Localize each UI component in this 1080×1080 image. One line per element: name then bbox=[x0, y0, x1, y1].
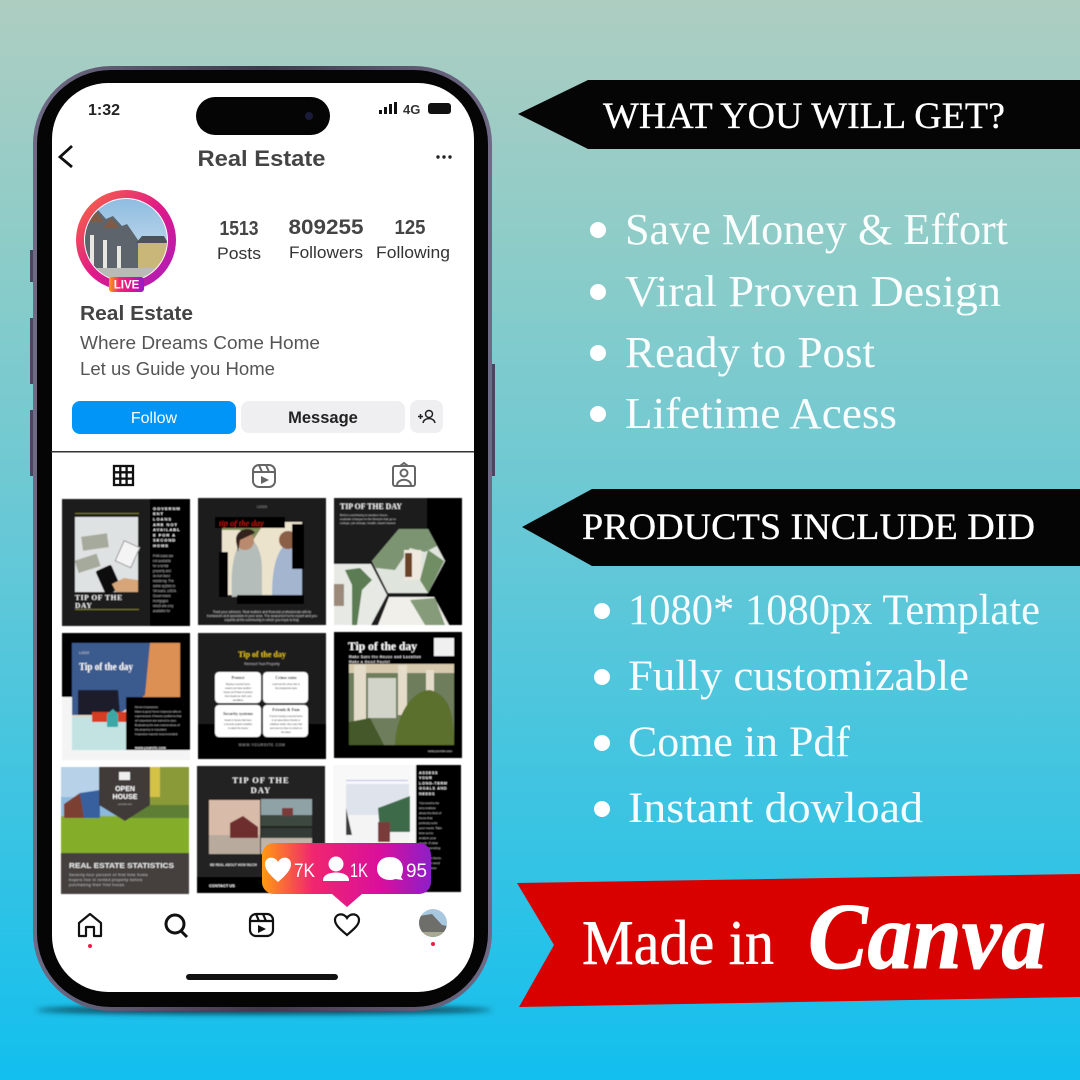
post thumbnail 2: LOGO bbox=[257, 505, 267, 509]
post thumbnail 4: Home inspections bbox=[135, 705, 159, 709]
likes count: 7K bbox=[294, 861, 315, 882]
post thumbnail 7: Seventy-four percent of first time home bbox=[69, 873, 148, 877]
post thumbnail 9: home that bbox=[419, 816, 433, 820]
back arrow bbox=[60, 146, 72, 167]
post thumbnail 5: WWW.YOURSITE.COM bbox=[239, 743, 285, 747]
post thumbnail 5: a security system installed bbox=[224, 723, 253, 726]
bullet: template size: 1080* 1080px Template bbox=[628, 587, 1040, 634]
post thumbnail 2: homework and specialize in your area. The seasoned home expert and you bbox=[207, 614, 317, 618]
post thumbnail 7: buyers live in rented property before bbox=[69, 878, 143, 882]
divider line bbox=[51, 451, 474, 452]
phone mockup bbox=[30, 66, 495, 1014]
ribbon: made in canva: Made in bbox=[582, 907, 774, 978]
post thumbnail 7: yoursite.com bbox=[118, 803, 132, 806]
post thumbnail 1: HOME bbox=[153, 543, 169, 548]
followers count: 1K bbox=[350, 861, 368, 882]
post thumbnail 5: to watch the house bbox=[228, 727, 249, 730]
bullet: instant download: Instant dowload bbox=[628, 785, 923, 832]
post thumbnail 5: the place bbox=[281, 731, 292, 734]
post thumbnail 1: which are only bbox=[153, 604, 174, 608]
post thumbnail 1: ARE NOT bbox=[153, 522, 178, 527]
post thumbnail 5: Crime rates bbox=[275, 675, 297, 680]
status icons: 4G bbox=[403, 102, 420, 117]
post thumbnail 9: you're spending bbox=[419, 846, 440, 850]
post thumbnail 8: CONTACT US bbox=[209, 883, 235, 888]
post thumbnail 7: REAL ESTATE STATISTICS bbox=[69, 862, 174, 870]
follow button bbox=[72, 401, 236, 434]
more menu bbox=[436, 155, 452, 159]
post thumbnail 9: perfectly suits bbox=[419, 821, 438, 825]
profile avatar bbox=[76, 190, 176, 292]
follow button: Follow bbox=[131, 410, 178, 427]
post thumbnail 5: If you're buying a second home bbox=[269, 715, 303, 718]
post thumbnail 8 bbox=[197, 766, 325, 893]
post thumbnail 5: vandalism bbox=[233, 699, 243, 702]
ribbon: made in canva bbox=[517, 874, 1080, 1007]
post thumbnail 9: ASSESS bbox=[419, 771, 438, 775]
banner: products include: PRODUCTS INCLUDE DID bbox=[582, 507, 1035, 548]
post thumbnail 8: DAY bbox=[251, 785, 271, 795]
bullet: viral design: Viral Proven Design bbox=[625, 267, 1001, 316]
post thumbnail 9: analyze your bbox=[419, 836, 436, 840]
benefits list bbox=[590, 205, 1008, 438]
post thumbnail 7: purchasing their first house. bbox=[69, 883, 126, 887]
post thumbnail 5: Tip of the day bbox=[238, 650, 286, 659]
post thumbnail 1 bbox=[62, 499, 190, 626]
profile stats: Followers bbox=[289, 244, 363, 262]
post thumbnail 4: the property is important. bbox=[135, 728, 167, 732]
post thumbnail 5: the prospective area bbox=[275, 687, 297, 690]
post thumbnail 9: your needs. Take bbox=[419, 826, 442, 830]
post thumbnail 5: from break-ins, theft, and bbox=[225, 695, 252, 698]
post thumbnail 9: about the kind of bbox=[419, 811, 441, 815]
post thumbnail 6: Make a Good Fauts! bbox=[349, 660, 390, 664]
post thumbnail 1: VA loans, USDA bbox=[153, 589, 177, 593]
comments count: 95 bbox=[406, 861, 427, 882]
post thumbnail 4: all inspectors are trained to spot. bbox=[135, 718, 177, 722]
bullet: save money: Save Money & Effort bbox=[625, 205, 1008, 254]
icon: person bbox=[323, 856, 349, 881]
post thumbnail 9: very realistic bbox=[419, 806, 436, 810]
post thumbnail 8: BE REAL ABOUT HOW MUCH bbox=[210, 863, 257, 867]
post thumbnail 5: means you have another bbox=[225, 687, 251, 690]
post thumbnail 7 bbox=[61, 767, 189, 894]
post thumbnail 1: same applies to bbox=[153, 584, 176, 588]
post thumbnail 9: GOALS AND bbox=[419, 786, 447, 790]
home indicator bbox=[186, 974, 338, 980]
post thumbnail 1: FHA loans are bbox=[153, 554, 173, 558]
post thumbnail 3: evaluate changes in the lifestyle that go to bbox=[340, 517, 396, 521]
post thumbnail 5: Friends & Fam bbox=[272, 707, 300, 712]
products list bbox=[594, 587, 1040, 832]
post thumbnail 9: retirement home, bbox=[419, 856, 442, 860]
post thumbnail 8: TIP OF THE bbox=[232, 775, 290, 785]
post thumbnail 4: Tip of the day bbox=[79, 662, 133, 673]
post thumbnail 9 bbox=[333, 765, 461, 892]
phone side buttons bbox=[30, 250, 495, 476]
post thumbnail 5: house you'll have to protect bbox=[223, 691, 253, 694]
banner: products include bbox=[522, 489, 1080, 566]
post thumbnail 2 bbox=[198, 498, 326, 625]
post thumbnail 1: do not need bbox=[153, 574, 170, 578]
post thumbnail 1: residency. The bbox=[153, 579, 174, 583]
post thumbnail 9: one with less bbox=[419, 866, 437, 870]
bullet: ready to post: Ready to Post bbox=[625, 328, 875, 377]
post thumbnail 5 bbox=[198, 633, 326, 759]
bullet: lifetime access: Lifetime Acess bbox=[625, 389, 897, 438]
post thumbnail 5: Protect bbox=[232, 675, 245, 680]
post thumbnail 4: www.yoursite.com bbox=[134, 746, 166, 750]
phone body bbox=[33, 66, 492, 1011]
post thumbnail 5: Look into the crime rate in bbox=[272, 683, 300, 686]
phone screen bbox=[52, 83, 474, 992]
banner: what you will get bbox=[518, 80, 1080, 149]
post thumbnail 4: LOGO bbox=[79, 651, 89, 655]
post thumbnail 7: OPEN bbox=[115, 786, 135, 793]
tab: reels icon bbox=[253, 465, 275, 487]
profile bio: Where Dreams Come Home bbox=[80, 333, 320, 353]
post thumbnail 9: upkeep bbox=[419, 871, 429, 875]
post thumbnail 4: Evaluating the true maintenance of bbox=[135, 723, 180, 727]
profile stats bbox=[217, 216, 450, 263]
profile stats: Posts bbox=[217, 245, 261, 263]
post thumbnail 1: for a rental bbox=[153, 564, 169, 568]
post thumbnail 5: Security systems bbox=[223, 711, 253, 716]
post thumbnail 3 bbox=[334, 498, 462, 625]
post thumbnail 1: DAY bbox=[75, 601, 92, 610]
nav: reels icon bbox=[250, 914, 273, 936]
post thumbnail 4: experienced. Inherent problems that bbox=[135, 714, 181, 718]
bullet: pdf: Come in Pdf bbox=[628, 719, 851, 766]
post thumbnail 9: NEEDS bbox=[419, 792, 435, 796]
post thumbnail 9: YOUR bbox=[419, 776, 432, 780]
post thumbnail 4 bbox=[62, 633, 190, 760]
post thumbnail 5: Rennect Your Property bbox=[244, 662, 280, 666]
post thumbnail 1: ENT bbox=[153, 511, 164, 516]
post thumbnail 1: mortgages bbox=[153, 599, 168, 603]
tab: tagged icon bbox=[393, 463, 415, 486]
profile bio: Let us Guide you Home bbox=[80, 359, 275, 379]
post thumbnail 5: and even be there to check on bbox=[270, 727, 303, 730]
post thumbnail 1: E FOR A bbox=[153, 532, 176, 538]
post thumbnail 9: needs. If what bbox=[419, 841, 438, 845]
post thumbnail 4: Inspection reports recommended. bbox=[135, 732, 178, 736]
post thumbnail 2: Trust your advisors. Real realtors and financial professionals will do bbox=[213, 610, 311, 614]
live badge: LIVE bbox=[114, 280, 140, 292]
profile bio: Real Estate bbox=[80, 303, 193, 325]
post thumbnail 9: time out to bbox=[419, 831, 433, 835]
post thumbnail 1: LOANS bbox=[153, 516, 172, 522]
nav: search icon bbox=[166, 915, 187, 937]
post thumbnail 3: college, job change, health, travel interest bbox=[340, 521, 396, 525]
post thumbnail 3: TIP OF THE DAY bbox=[340, 502, 402, 511]
post thumbnail 1: Government bbox=[153, 594, 171, 598]
post thumbnail 6: Make Sure the House and Location bbox=[349, 655, 421, 659]
profile bio bbox=[80, 303, 320, 379]
post thumbnail 1: available for bbox=[153, 609, 171, 613]
icon: heart bbox=[265, 858, 291, 882]
post thumbnail 6: Tip of the day bbox=[348, 641, 417, 653]
message button bbox=[241, 401, 405, 433]
post thumbnail 6 bbox=[334, 632, 462, 758]
post thumbnail 3: Before purchasing a vacation home, bbox=[340, 513, 388, 517]
post thumbnail 1: GOVERNM bbox=[153, 506, 181, 511]
post thumbnail 2: tip of the day bbox=[219, 518, 264, 528]
status icons bbox=[379, 102, 451, 117]
post thumbnail 1: SECOND bbox=[153, 538, 176, 542]
post thumbnail 9: for is a bbox=[419, 851, 428, 855]
banner: what you will get: WHAT YOU WILL GET? bbox=[603, 96, 1005, 137]
post thumbnail 4: Have a good home inspector who is bbox=[135, 710, 182, 714]
profile title: Real Estate bbox=[198, 146, 326, 171]
bullet: customizable: Fully customizable bbox=[628, 653, 969, 700]
add friend button bbox=[410, 400, 443, 433]
message button: Message bbox=[288, 409, 358, 427]
post thumbnail 5: Buying a second home bbox=[226, 683, 251, 686]
post thumbnail 2: experts at the community in which you hope to buy. bbox=[225, 618, 299, 622]
post thumbnail 1: TIP OF THE bbox=[75, 593, 123, 602]
profile stats: 1513 bbox=[220, 218, 258, 240]
nav: home icon bbox=[79, 914, 101, 948]
status time: 1:32 bbox=[88, 102, 120, 119]
tab: grid icon bbox=[114, 466, 133, 485]
profile stats: 125 bbox=[394, 217, 426, 239]
nav: profile avatar bbox=[419, 909, 447, 946]
nav: heart icon bbox=[335, 914, 359, 935]
post thumbnail 1: property and bbox=[153, 569, 171, 573]
post thumbnail 9: you might need bbox=[419, 861, 440, 865]
icon: comment bubble bbox=[377, 857, 403, 880]
post thumbnail 5: in an area where friends or bbox=[272, 719, 300, 722]
post thumbnail 1: not available bbox=[153, 559, 171, 563]
post thumbnail 1: AVAILABL bbox=[153, 527, 181, 532]
post thumbnail 7: HOUSE bbox=[113, 794, 138, 801]
ribbon: made in canva: Canva bbox=[808, 885, 1046, 989]
post thumbnail 9: You need to be bbox=[419, 801, 439, 805]
post thumbnail 5: Invest in homes that have bbox=[224, 719, 252, 722]
phone bezel bbox=[37, 70, 488, 1007]
profile stats: Following bbox=[376, 244, 450, 262]
notification badge bbox=[262, 843, 431, 907]
phone ground shadow bbox=[36, 1006, 492, 1014]
post thumbnail 6: www.yoursite.com bbox=[428, 749, 452, 753]
post thumbnail 5: relatives reside, they may help bbox=[270, 723, 303, 726]
post thumbnail 9: LONG-TERM bbox=[419, 782, 448, 786]
dynamic island bbox=[196, 97, 330, 135]
profile stats: 809255 bbox=[288, 216, 364, 239]
